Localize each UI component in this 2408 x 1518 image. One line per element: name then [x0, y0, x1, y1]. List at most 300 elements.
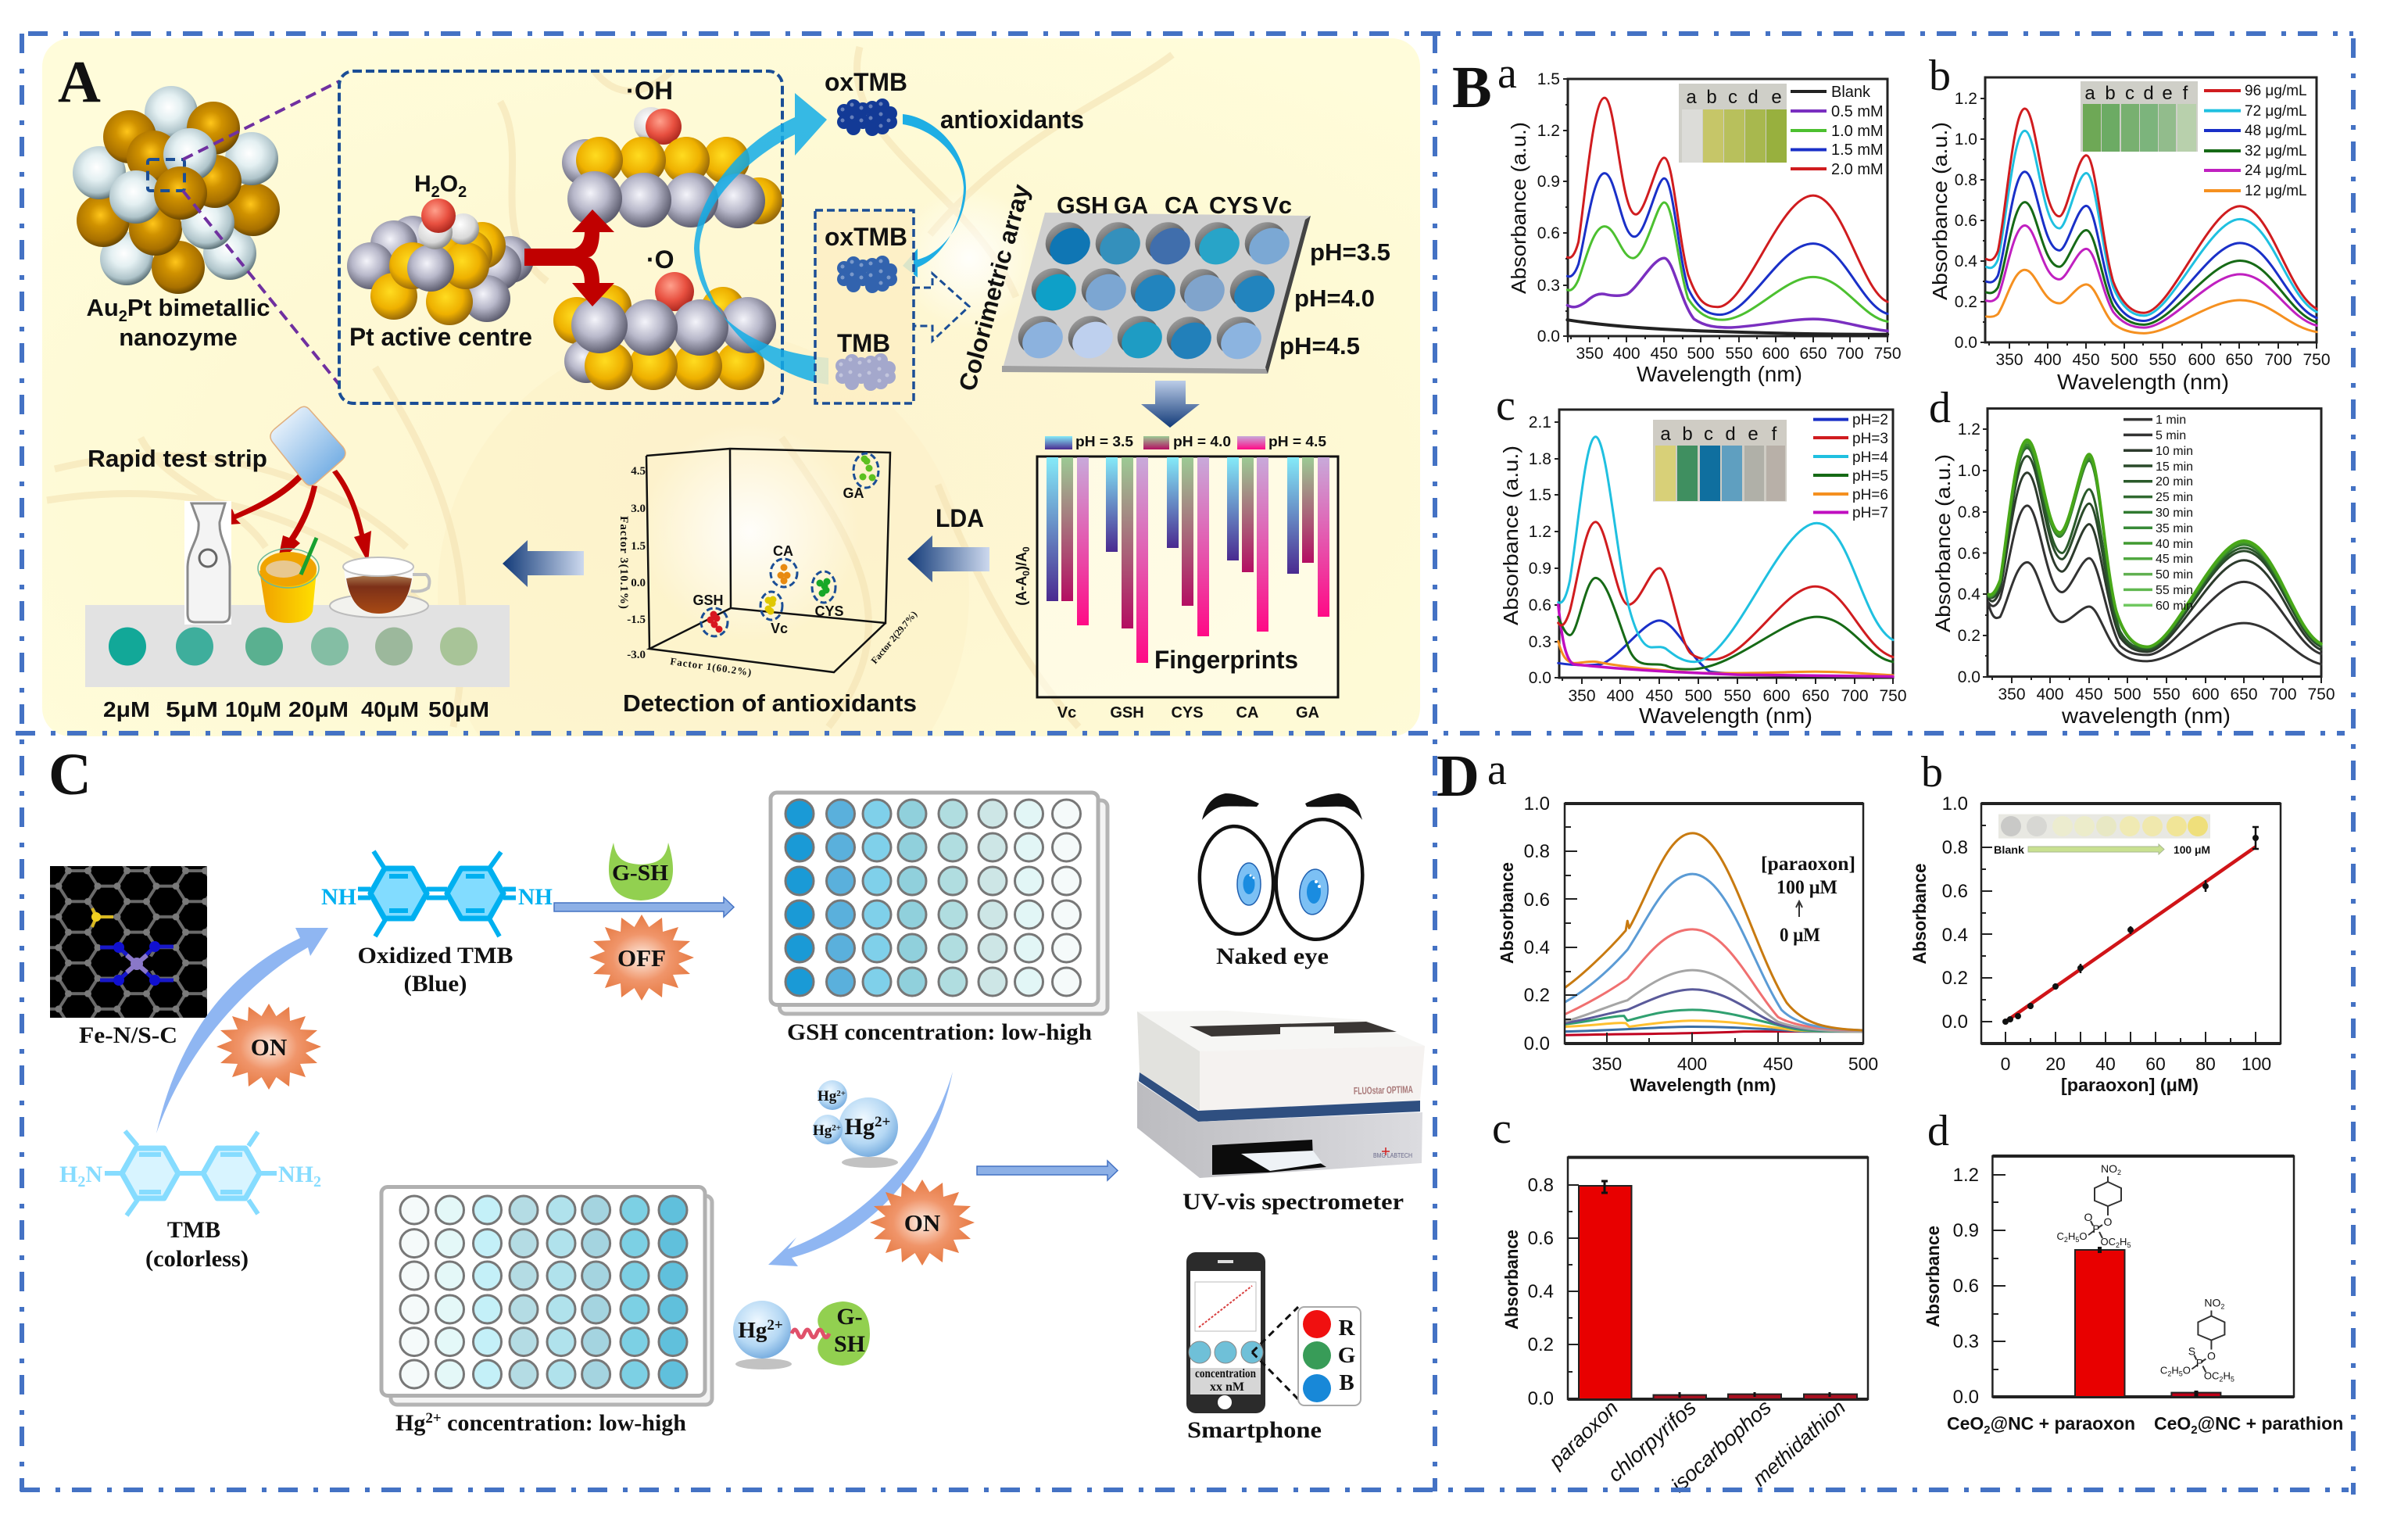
bar chart: fingerprints: 0 — [1021, 571, 1032, 576]
structure: parathion: 5 — [2179, 1369, 2183, 1377]
panel A background — [42, 38, 1420, 736]
burst: OFF — [589, 915, 694, 1001]
chart B-b: 1.2 — [1955, 90, 1977, 108]
chart B-a: 0.6 — [1537, 224, 1560, 242]
icon: G-SH — [609, 843, 673, 900]
structure: parathion: H — [2223, 1369, 2231, 1382]
chart D-b: 0.4 — [1942, 925, 1968, 946]
chart D-d: CeO — [2154, 1413, 2191, 1434]
chart B-a: 400 — [1612, 345, 1641, 363]
arrow: TMB to oxidized TMB — [156, 928, 328, 1133]
label: Oxidized TMB (Blue) — [358, 943, 513, 997]
icon: Hg2+ ions group: Hg — [813, 1122, 832, 1139]
plate pH labels: pH=4.0 — [1294, 285, 1375, 312]
chart B-d: 40 min — [2156, 538, 2193, 551]
chart D-a: [paraoxon] — [1761, 854, 1855, 875]
molecule: TMB colorless: 2 — [77, 1173, 85, 1190]
structure: paraoxon: H — [2120, 1236, 2127, 1248]
panel letter D: D — [1437, 743, 1480, 809]
zoom lines from cluster to active centre box — [183, 81, 339, 385]
label: Pt active centre: Pt active centre — [349, 323, 532, 351]
icon: Hg2+ bound to G-SH: Hg — [738, 1318, 767, 1343]
chart B-a: 0.5 mM — [1831, 103, 1884, 120]
chart B-d: 1.2 — [1958, 421, 1980, 439]
3D scatter plot: LDA clusters: Factor 2(29.7%) — [869, 609, 919, 666]
bar chart: fingerprints: 0 — [1021, 546, 1032, 552]
chart D-b: 0.6 — [1942, 881, 1968, 902]
label: TMB: TMB — [837, 329, 890, 357]
label: Au2Pt bimetallic nanozyme: 2 — [119, 308, 127, 325]
label: Au2Pt bimetallic nanozyme: nanozyme — [119, 324, 238, 351]
chart B-d: 0.2 — [1958, 627, 1980, 645]
icon: smartphone: xx nM — [1210, 1380, 1244, 1394]
structure: paraoxon: 2 — [2064, 1236, 2068, 1244]
molecule: TMB colorless: NH — [278, 1162, 313, 1187]
chart D-b: 80 — [2195, 1054, 2216, 1074]
chart D-a: Wavelength (nm) — [1630, 1075, 1776, 1095]
label: TMB colorless: TMB — [167, 1217, 220, 1243]
label: hydroxyl radical: ·OH — [626, 77, 673, 105]
chart D-c: 0.0 — [1528, 1388, 1554, 1409]
chart B-d: 1.0 — [1958, 462, 1980, 480]
3D scatter plot: LDA clusters: GA — [843, 485, 864, 501]
chart B-c: 1.8 — [1529, 450, 1551, 468]
structure: paraoxon: 2 — [2116, 1241, 2120, 1249]
panel A: bimetallic nanozyme colorimetric array — [42, 38, 1420, 736]
fingerprint legend: pH = 4.5 — [1268, 434, 1326, 449]
plate pH labels — [1279, 238, 1390, 360]
label: Smartphone: Smartphone — [1187, 1417, 1322, 1443]
fingerprint legend — [1045, 434, 1326, 449]
chart D-b: Blank — [1994, 843, 2024, 856]
chart B-c: 400 — [1606, 687, 1634, 705]
plate column labels: GA — [1114, 192, 1148, 219]
chart D-b: 1.0 — [1942, 793, 1968, 814]
arrow: antioxidants curved reduction — [903, 114, 966, 277]
chart D-d: @NC + parathion — [2198, 1413, 2343, 1434]
3D scatter plot: LDA clusters: Factor 3(10.1%) — [617, 516, 630, 610]
icon: test strip diamond — [270, 406, 345, 485]
chart D-a: 450 — [1763, 1054, 1793, 1074]
label: TMB colorless: (colorless) — [145, 1246, 249, 1272]
molecule: TMB colorless — [59, 1131, 321, 1215]
icon: TMB molecule grey — [835, 353, 896, 391]
icon: G-SH: G-SH — [612, 861, 668, 886]
chart B-b: Wavelength (nm) — [2057, 370, 2229, 394]
chart B-d: 350 — [1998, 686, 2026, 704]
icon: glass bottle — [184, 501, 231, 625]
chart D-a: 100 μM — [1776, 877, 1837, 898]
concentration labels: 5μM — [166, 697, 218, 721]
structure: parathion: 2 — [2219, 1376, 2223, 1384]
chart B-c: pH=4 — [1852, 449, 1888, 466]
chart B-b: 48 μg/mL — [2245, 123, 2307, 139]
bar chart: fingerprints: GSH — [1110, 704, 1144, 721]
chart B-d: 1 min — [2156, 414, 2186, 427]
chart D-d: CeO — [1947, 1413, 1984, 1434]
plate column labels: Vc — [1262, 192, 1292, 219]
chart B-d: 45 min — [2156, 553, 2193, 566]
chart B-a: Wavelength (nm) — [1637, 362, 1802, 386]
arrows: red to samples — [207, 470, 371, 563]
chart B-c: e — [1748, 424, 1759, 445]
chart B-d: 5 min — [2156, 429, 2186, 442]
structure: paraoxon: H — [2068, 1230, 2075, 1242]
chart B-c: d — [1725, 424, 1736, 445]
chart B-b: 12 μg/mL — [2245, 183, 2307, 199]
chart B-c: 600 — [1762, 687, 1791, 705]
chart B-a: 700 — [1836, 345, 1864, 363]
structure: parathion: O — [2207, 1349, 2216, 1362]
chart D-b: 100 μM — [2174, 843, 2210, 856]
chart B-b: f — [2183, 83, 2188, 104]
label: TMB colorless — [145, 1217, 249, 1272]
chart B-d: 450 — [2075, 686, 2103, 704]
arrow: to spectrometer — [977, 1161, 1118, 1180]
label: H2O2: O — [440, 171, 458, 197]
chart D-d: 0.3 — [1953, 1331, 1979, 1352]
chart B-a: 2.0 mM — [1831, 161, 1884, 178]
arrow: 3D plot to detection — [503, 540, 584, 587]
chart B-a: 1.2 — [1537, 122, 1560, 140]
chart B-b: 550 — [2149, 351, 2177, 369]
chart D-b: 40 — [2095, 1054, 2116, 1074]
chart D-a: Absorbance — [1497, 862, 1517, 964]
panel C: GSH and Hg2+ detection workflow — [48, 742, 1425, 1443]
chart D-b: 0 — [2001, 1054, 2010, 1074]
chart B-b: a — [2084, 83, 2095, 104]
chart D-b: Absorbance — [1909, 863, 1930, 965]
chart B-d: wavelength (nm) — [2061, 704, 2231, 728]
chart B-b: d — [2143, 83, 2154, 104]
chart D-a — [1487, 746, 1878, 1095]
chart D-b: 0.0 — [1942, 1011, 1968, 1033]
chart B-d: 600 — [2192, 686, 2220, 704]
structure: parathion: OC — [2204, 1369, 2219, 1382]
chart B-a: 0.9 — [1537, 173, 1560, 191]
structure: parathion: 5 — [2231, 1376, 2234, 1384]
chart D-b: 60 — [2145, 1054, 2166, 1074]
label: Naked eye: Naked eye — [1216, 943, 1329, 969]
chart B-a: d — [1748, 87, 1759, 108]
chart B-d: 50 min — [2156, 568, 2193, 582]
chart B-d: 550 — [2152, 686, 2181, 704]
chart D-c — [1492, 1104, 1868, 1497]
chart D-d: 2 — [1984, 1423, 1991, 1437]
concentration labels: 20μM — [288, 697, 349, 721]
label: oxTMB: oxTMB — [825, 223, 907, 251]
molecule: TMB colorless: H — [59, 1162, 77, 1187]
structure: paraoxon: O — [2084, 1211, 2093, 1223]
fingerprint legend: pH = 4.0 — [1173, 434, 1231, 449]
3D scatter plot: LDA clusters: CYS — [814, 603, 844, 619]
icon: Hg2+ bound to G-SH: SH — [834, 1331, 865, 1357]
chart D-d: d — [1927, 1107, 1949, 1155]
structure: paraoxon: 2 — [2117, 1169, 2121, 1176]
burst: ON first: ON — [251, 1033, 287, 1061]
chart B-d: 25 min — [2156, 491, 2193, 504]
chart B-a: a — [1686, 87, 1697, 108]
bar chart: fingerprints: CYS — [1171, 704, 1204, 721]
chart D-c: Absorbance — [1501, 1230, 1522, 1330]
bar chart: fingerprints: )/A — [1014, 552, 1029, 571]
chart D-c: c — [1492, 1104, 1512, 1153]
panel letter B: B — [1452, 55, 1492, 120]
chart D-a: 0 μM — [1780, 925, 1820, 946]
RGB readout: G — [1338, 1343, 1355, 1368]
chart D-a: 0.4 — [1524, 937, 1550, 958]
chart B-d: 20 min — [2156, 475, 2193, 489]
label: Hg2+ concentration: 2+ — [425, 1410, 442, 1427]
chart D-b — [1909, 748, 2281, 1095]
chart D-a: 1.0 — [1524, 793, 1550, 814]
chart D-c: chlorpyrifos — [1603, 1394, 1701, 1487]
chart B-b: 0.0 — [1955, 334, 1977, 352]
burst: ON first — [216, 1004, 321, 1090]
arrow: LDA to 3D plot — [907, 535, 989, 582]
icon: oxTMB molecule blue — [837, 256, 897, 293]
chart D-c: 0.2 — [1528, 1334, 1554, 1355]
bar chart: fingerprints: CA — [1236, 704, 1258, 721]
arrow: cyan curved TMB to oxTMB — [694, 93, 828, 385]
molecule: TMB colorless: N — [85, 1162, 102, 1187]
icon: UV-vis spectrometer: FLUOstar OPTIMA — [1354, 1083, 1413, 1097]
chart B-c: 0.9 — [1529, 560, 1551, 578]
chart B-a: 650 — [1799, 345, 1827, 363]
label: Detection of antioxidants: Detection of antioxidants — [623, 689, 917, 717]
chart B-c: pH=6 — [1852, 487, 1888, 503]
chart B-b: 700 — [2264, 351, 2292, 369]
chart B-a: 750 — [1873, 345, 1902, 363]
chart D-d: @NC + paraoxon — [1991, 1413, 2135, 1434]
icon: Hg2+ ions group — [813, 1080, 898, 1168]
chart B-c: f — [1772, 424, 1777, 445]
concentration labels: 50μM — [428, 697, 489, 721]
chart D-d: 1.2 — [1953, 1165, 1979, 1186]
chart B-a: 450 — [1650, 345, 1678, 363]
chart D-b: b — [1921, 748, 1943, 797]
molecule: oxidized TMB blue: NH — [518, 884, 553, 910]
chart D-b: 0.2 — [1942, 968, 1968, 989]
chart D-c: 0.8 — [1528, 1175, 1554, 1196]
chart B-d: d — [1929, 384, 1951, 432]
molecule: TMB colorless: 2 — [313, 1173, 321, 1190]
dashed box: Pt active centre mechanism — [339, 71, 782, 403]
label: Rapid test strip: Rapid test strip — [88, 445, 267, 472]
chart B-a: c — [1728, 87, 1737, 108]
icon: Hg2+ ions group: 2+ — [836, 1089, 846, 1098]
chart B-b: 0.2 — [1955, 293, 1977, 311]
fingerprint legend: pH = 3.5 — [1075, 434, 1133, 449]
structure: parathion: 2 — [2167, 1369, 2171, 1377]
dashed box: oxTMB and TMB — [815, 210, 914, 403]
chart B-c: 650 — [1802, 687, 1830, 705]
chart B-a: 0.3 — [1537, 277, 1560, 295]
icon: Au2Pt nanoparticle cluster — [73, 86, 280, 294]
label: UV-vis spectrometer: UV-vis spectrometer — [1183, 1189, 1404, 1215]
chart B-a: e — [1771, 87, 1782, 108]
chart B-c: 550 — [1723, 687, 1751, 705]
panel letter A: A — [58, 49, 101, 115]
icon: smartphone: concentration — [1195, 1367, 1256, 1380]
chart B-a: 550 — [1725, 345, 1753, 363]
structure: paraoxon: P — [2092, 1223, 2100, 1235]
test strip tray with spots — [85, 605, 510, 687]
structure: parathion: H — [2171, 1365, 2179, 1376]
chart D-c: isocarbophos — [1667, 1395, 1776, 1497]
chart B-c: Absorbance (a.u.) — [1499, 446, 1522, 625]
chart B-a: 1.0 mM — [1831, 123, 1884, 140]
chart D-a: 400 — [1677, 1054, 1707, 1074]
chart B-b: c — [2125, 83, 2134, 104]
chart B-b: 32 μg/mL — [2245, 143, 2307, 159]
chart D-d: 0.6 — [1953, 1276, 1979, 1297]
chart B-b: 24 μg/mL — [2245, 163, 2307, 179]
structure: parathion: NO — [2204, 1296, 2220, 1309]
chart B-d: 650 — [2230, 686, 2258, 704]
chart B-d: 400 — [2036, 686, 2064, 704]
chart B-c: 2.1 — [1529, 414, 1551, 431]
chart B-b: 72 μg/mL — [2245, 103, 2307, 120]
chart B-b: 0.8 — [1955, 171, 1977, 189]
plate pH labels: pH=4.5 — [1279, 332, 1360, 360]
chart B-c: b — [1682, 424, 1693, 445]
chart B-b: 500 — [2110, 351, 2138, 369]
chart B-c: pH=7 — [1852, 505, 1888, 521]
RGB readout — [1252, 1307, 1361, 1405]
chart B-d: Absorbance (a.u.) — [1931, 454, 1955, 632]
label: Hg2+ concentration: Hg — [395, 1410, 425, 1436]
icon: smartphone — [1186, 1252, 1265, 1413]
chart B-b: 350 — [1995, 351, 2023, 369]
chart B-a: 0.0 — [1537, 328, 1560, 345]
chart D-c: 0.6 — [1528, 1228, 1554, 1249]
chart B-d: 750 — [2307, 686, 2335, 704]
icon: Hg2+ ions group: Hg — [818, 1088, 836, 1104]
chart B-b: 450 — [2072, 351, 2100, 369]
chart B-d: 10 min — [2156, 445, 2193, 458]
chart D-b: [paraoxon] (μM) — [2061, 1075, 2199, 1095]
chart B-c: 700 — [1841, 687, 1869, 705]
chart B-a: Absorbance (a.u.) — [1507, 122, 1530, 294]
label: O radical: ·O — [646, 245, 674, 274]
label: Fe-N/S-C: Fe-N/S-C — [79, 1022, 177, 1048]
label: Oxidized TMB (Blue): (Blue) — [403, 971, 467, 997]
3D scatter plot: LDA clusters: 3.0 — [631, 503, 646, 515]
chart B-c: 0.3 — [1529, 633, 1551, 651]
chart B-c: 1.2 — [1529, 523, 1551, 541]
3D scatter plot: LDA clusters: GSH — [692, 593, 724, 608]
chart B-a: 350 — [1576, 345, 1604, 363]
image: Fe-N/S-C lattice — [50, 866, 207, 1018]
chart B-d: 55 min — [2156, 584, 2193, 597]
chart D-d — [1923, 1107, 2343, 1437]
chart B-d — [1929, 384, 2335, 728]
3D scatter plot: LDA clusters: 1.5 — [631, 540, 646, 553]
chart B-c: pH=5 — [1852, 468, 1888, 485]
label: LDA: LDA — [936, 504, 984, 532]
chart B-a: b — [1706, 87, 1717, 108]
label: Au2Pt bimetallic nanozyme: Au — [86, 294, 119, 321]
label: Oxidized TMB (Blue): Oxidized TMB — [358, 943, 513, 968]
icon: Hg2+ ions group: Hg — [845, 1114, 875, 1140]
chart D-a: a — [1487, 746, 1507, 794]
structure: parathion: P — [2196, 1357, 2203, 1369]
label: H2O2: 2 — [431, 184, 440, 201]
chart D-c: 0.4 — [1528, 1281, 1554, 1302]
chart B-d: 60 min — [2156, 600, 2193, 613]
structure: paraoxon: C — [2057, 1230, 2064, 1242]
chart B-c: 1.5 — [1529, 486, 1551, 504]
chart B-b: 0.4 — [1955, 252, 1977, 270]
burst: ON second: ON — [904, 1209, 940, 1237]
chart D-a: 500 — [1848, 1054, 1878, 1074]
chart B-c: 0.6 — [1529, 596, 1551, 614]
3D scatter plot: LDA clusters: 0.0 — [631, 577, 646, 589]
concentration labels: 2μM — [103, 697, 150, 721]
chart B-b: 400 — [2034, 351, 2062, 369]
chart D-a: 0.2 — [1524, 985, 1550, 1006]
chart B-a: 1.5 mM — [1831, 141, 1884, 159]
icon: surface with OH — [562, 107, 782, 228]
structure: paraoxon: OC — [2101, 1236, 2116, 1248]
label: H2O2: H — [414, 171, 431, 197]
chart B-b — [1928, 52, 2331, 394]
3D scatter plot: LDA clusters: 4.5 — [631, 465, 646, 478]
chart B-d: 35 min — [2156, 522, 2193, 535]
burst: OFF: OFF — [617, 944, 666, 972]
chart B-b: 96 μg/mL — [2245, 83, 2307, 99]
chart B-c: 500 — [1684, 687, 1712, 705]
chart B-d: 700 — [2269, 686, 2297, 704]
RGB readout: R — [1339, 1316, 1356, 1341]
chart D-a: 350 — [1592, 1054, 1622, 1074]
icon: Hg2+ bound to G-SH: 2+ — [767, 1317, 783, 1334]
chart B-a — [1497, 49, 1902, 386]
chart B-c: pH=3 — [1852, 431, 1888, 447]
concentration labels: 10μM — [225, 697, 281, 721]
chart D-b: 0.8 — [1942, 837, 1968, 858]
panel letter C: C — [48, 742, 91, 807]
plate column labels — [1057, 192, 1292, 219]
icon: Hg2+ ions group: 2+ — [875, 1114, 890, 1130]
label: H2O2: 2 — [458, 184, 467, 201]
plate: Hg2+ concentration — [381, 1187, 712, 1405]
molecule: oxidized TMB blue — [321, 851, 553, 936]
3D scatter plot: LDA clusters: Vc — [771, 621, 788, 636]
chart B-d: 30 min — [2156, 507, 2193, 520]
chart D-a: 0.6 — [1524, 890, 1550, 911]
icon: UV-vis spectrometer — [1137, 1011, 1425, 1178]
chart B-d: 15 min — [2156, 460, 2193, 474]
icon: Pt active centre atoms — [347, 199, 534, 325]
label: GSH concentration: GSH concentration: low-high — [787, 1019, 1092, 1045]
chart B-a: Blank — [1831, 84, 1871, 101]
structure: paraoxon: O — [2104, 1215, 2113, 1228]
chart D-d: 0.0 — [1953, 1387, 1979, 1408]
chart B-b: e — [2162, 83, 2173, 104]
chart B-d: 0.6 — [1958, 545, 1980, 563]
structure: parathion: C — [2160, 1365, 2167, 1376]
chart B-c: Wavelength (nm) — [1639, 704, 1812, 728]
chart B-a: a — [1497, 49, 1517, 98]
label: Colorimetric array: Colorimetric array — [954, 181, 1035, 394]
chart B-b: 750 — [2302, 351, 2331, 369]
chart B-b: b — [1929, 52, 1951, 100]
bar chart: fingerprints: GA — [1296, 704, 1319, 721]
plate column labels: CA — [1165, 192, 1199, 219]
chart B-a: 500 — [1687, 345, 1715, 363]
